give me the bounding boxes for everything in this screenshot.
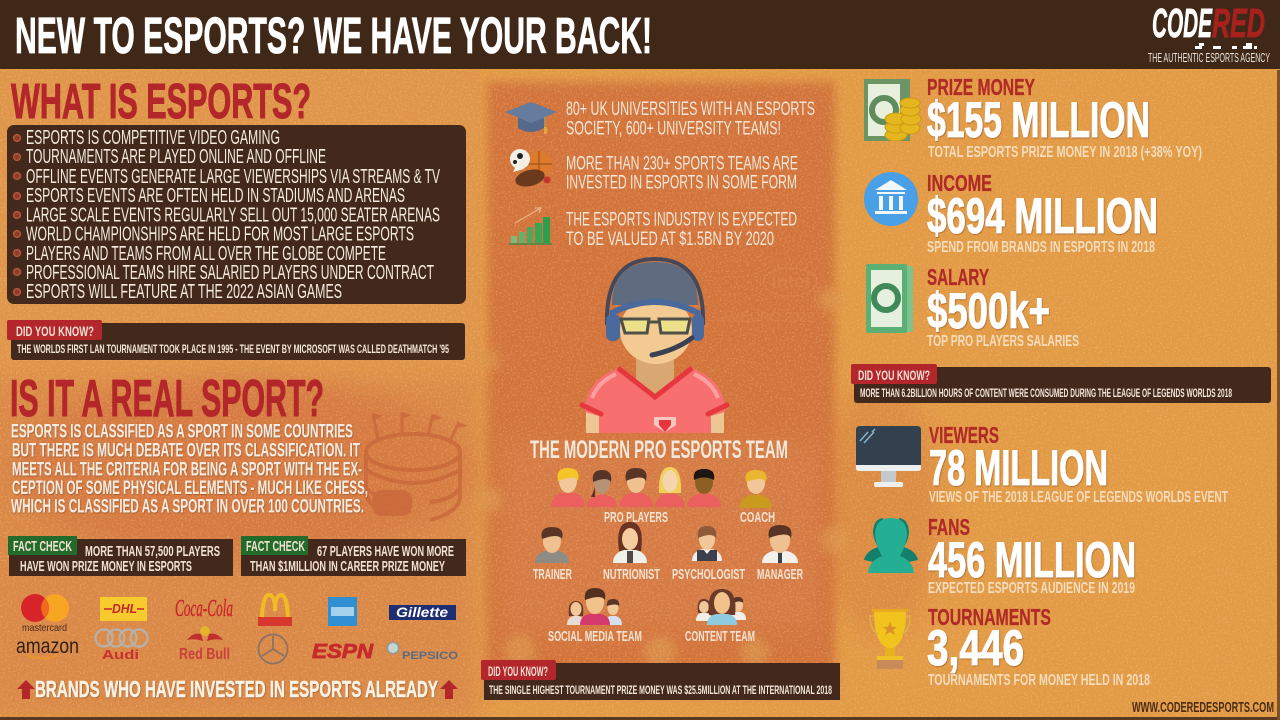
stat: salary: $500k+ (927, 283, 1050, 339)
callout: did you know 1995: THE WORLDS FIRST LAN TOURNAMENT TOOK PLACE IN 1995 - THE EVENT BY MICROSOFT WAS CALLED DEATHMATCH '95 (17, 342, 449, 356)
heading: team: THE MODERN PRO ESPORTS TEAM (530, 436, 788, 464)
person: trainer: TRAINER (533, 567, 572, 583)
group: social media team: SOCIAL MEDIA TEAM (548, 629, 642, 645)
callout: fact check players: FACT CHECK (13, 539, 72, 555)
stat: fans: FANS (928, 514, 970, 540)
stat: salary: SALARY (927, 264, 989, 290)
logo: dhl: DHL (112, 601, 137, 616)
stat: income: $694 MILLION (927, 188, 1158, 244)
stat: income: SPEND FROM BRANDS IN ESPORTS IN 2018 (927, 239, 1155, 256)
callout: did you know 1995: DID YOU KNOW? (16, 323, 94, 339)
logo: mcdonalds (258, 595, 292, 626)
stat: tournaments: TOURNAMENTS FOR MONEY HELD IN 2018 (928, 672, 1150, 689)
caption: brands with arrows: BRANDS WHO HAVE INVESTED IN ESPORTS ALREADY (35, 676, 438, 702)
icon: trophy (870, 609, 910, 669)
header band (0, 0, 1280, 69)
icon: sports balls (510, 149, 552, 189)
stat: prize money: PRIZE MONEY (927, 74, 1035, 100)
callout: did you know prize: THE SINGLE HIGHEST TOURNAMENT PRIZE MONEY WAS $25.5MILLION AT THE INTERNATIONAL 2018 (489, 683, 832, 697)
stat: sports teams: INVESTED IN ESPORTS IN SOME FORM (566, 172, 797, 194)
logo: red bull (179, 626, 230, 663)
list panel: LARGE SCALE EVENTS REGULARLY SELL OUT 15,000 SEATER ARENAS (26, 204, 440, 226)
logo: red bull: Red Bull (179, 646, 230, 663)
callout: did you know 1995 (7, 320, 465, 360)
person: coach: COACH (740, 510, 775, 526)
group: social media team (548, 588, 642, 645)
logo: espn: ESPN (312, 641, 374, 663)
icon: stadium backdrop (366, 412, 468, 520)
panel: is it a real sport (10, 370, 368, 518)
illustration: pro gamer (582, 259, 727, 433)
stat: industry value: TO BE VALUED AT $1.5BN BY 2020 (566, 228, 774, 250)
stat: fans: EXPECTED ESPORTS AUDIENCE IN 2019 (928, 580, 1135, 597)
group: content team: CONTENT TEAM (685, 629, 755, 645)
callout: fact check players: MORE THAN 57,500 PLAYERS (85, 544, 220, 560)
logo: coca-cola: Coca-Cola (175, 596, 233, 622)
icon: money and coins (864, 79, 921, 141)
icon: graduation cap (505, 102, 557, 134)
list panel: ESPORTS WILL FEATURE AT THE 2022 ASIAN GAMES (26, 281, 342, 303)
callout: fact check players: HAVE WON PRIZE MONEY IN ESPORTS (20, 559, 192, 575)
logo: american express (328, 597, 357, 626)
callout: fact check millionaires: FACT CHECK (246, 539, 305, 555)
stat: viewers: VIEWERS (929, 422, 999, 448)
icon: banknote (866, 264, 913, 333)
stat: prize money (864, 74, 1202, 161)
stat: tournaments: 3,446 (927, 620, 1024, 676)
list panel: PROFESSIONAL TEAMS HIRE SALARIED PLAYERS UNDER CONTRACT (26, 262, 434, 284)
list panel (7, 125, 466, 304)
callout: fact check millionaires: 67 PLAYERS HAVE WON MORE (317, 544, 454, 560)
paragraph: classification: BUT THERE IS MUCH DEBATE OVER ITS CLASSIFICATION. IT (12, 440, 360, 462)
stat: sports teams: MORE THAN 230+ SPORTS TEAMS ARE (566, 152, 798, 174)
ghost sponsor backdrop: AMBURG 2018 (720, 309, 815, 326)
stat: tournaments (870, 604, 1150, 689)
stat: viewers (856, 422, 1228, 506)
stat: industry value (566, 208, 797, 250)
logo: audi: Audi (102, 647, 139, 662)
panel: centre stats (505, 98, 815, 250)
stat: salary (866, 264, 1079, 350)
paragraph: classification: ESPORTS IS CLASSIFIED AS A SPORT IN SOME COUNTRIES (11, 422, 353, 442)
stat: industry value: THE ESPORTS INDUSTRY IS EXPECTED (566, 208, 797, 230)
logo: audi (96, 630, 148, 662)
callout: did you know hours (851, 364, 1271, 403)
stat: universities: 80+ UK UNIVERSITIES WITH AN ESPORTS (566, 98, 815, 120)
person: manager (757, 525, 803, 583)
logo: amazon: amazon (16, 635, 79, 658)
icon: bank (864, 172, 918, 226)
logo: mastercard: mastercard (22, 622, 67, 634)
title: NEW TO ESPORTS? WE HAVE YOUR BACK! (15, 7, 652, 64)
stat: fans (864, 514, 1136, 597)
list panel: ESPORTS IS COMPETITIVE VIDEO GAMING (26, 127, 280, 149)
logo: pepsico (388, 642, 459, 662)
logo: CodeRed (1148, 0, 1270, 65)
stat: prize money: $155 MILLION (927, 92, 1150, 148)
stat: income: INCOME (927, 170, 992, 196)
person: psychologist: PSYCHOLOGIST (672, 567, 745, 583)
logo: dhl (100, 597, 147, 621)
list panel: TOURNAMENTS ARE PLAYED ONLINE AND OFFLINE (26, 146, 326, 168)
heading: is it a real sport: IS IT A REAL SPORT? (10, 370, 324, 428)
callout: fact check millionaires: THAN $1MILLION IN CAREER PRIZE MONEY (250, 559, 445, 575)
person: manager: MANAGER (757, 567, 803, 583)
person: psychologist (672, 526, 745, 583)
stat: fans: 456 MILLION (928, 532, 1136, 588)
logo: mercedes (258, 634, 288, 664)
stat: tournaments: TOURNAMENTS (928, 604, 1051, 630)
brand logos (16, 594, 459, 664)
heading: what is esports: WHAT IS ESPORTS? (11, 75, 311, 129)
logo: pepsico: PEPSICO (402, 650, 459, 662)
callout: did you know prize (481, 660, 840, 700)
paragraph: classification: MEETS ALL THE CRITERIA FOR BEING A SPORT WITH THE EX- (12, 460, 362, 480)
list panel: WORLD CHAMPIONSHIPS ARE HELD FOR MOST LARGE ESPORTS (26, 224, 414, 246)
logo: gillette: Gillette (396, 604, 448, 620)
ghost sponsor backdrop: intel (772, 272, 810, 292)
stat: salary: TOP PRO PLAYERS SALARIES (927, 333, 1079, 350)
stat: sports teams (566, 152, 798, 194)
ghost sponsor backdrop (720, 268, 817, 326)
paragraph: classification: CEPTION OF SOME PHYSICAL ELEMENTS - MUCH LIKE CHESS, (12, 478, 368, 499)
logo: CodeRed: CODE (1152, 0, 1213, 46)
panel: what is esports (7, 75, 466, 304)
person: nutritionist: NUTRIONIST (603, 567, 660, 583)
icon: people (864, 518, 918, 573)
callout: did you know prize: DID YOU KNOW? (488, 663, 548, 679)
stat: universities (566, 98, 815, 140)
paragraph: classification (11, 422, 368, 518)
callout: did you know hours: DID YOU KNOW? (858, 367, 930, 383)
caption: brands with arrows (17, 676, 458, 702)
stat: income (864, 170, 1158, 256)
callout: fact check players (8, 536, 233, 576)
panel: modern pro esports team (530, 436, 803, 645)
group: pro players (551, 467, 721, 526)
stat: viewers: 78 MILLION (929, 440, 1108, 496)
list panel: ESPORTS EVENTS ARE OFTEN HELD IN STADIUMS AND ARENAS (26, 185, 405, 207)
stat: universities: SOCIETY, 600+ UNIVERSITY TEAMS! (566, 118, 781, 140)
group: content team (685, 589, 755, 645)
list panel: PLAYERS AND TEAMS FROM ALL OVER THE GLOBE COMPETE (26, 243, 386, 265)
person: nutritionist (603, 522, 660, 583)
group: pro players: PRO PLAYERS (604, 510, 668, 526)
paragraph: classification: WHICH IS CLASSIFIED AS A SPORT IN OVER 100 COUNTRIES. (11, 496, 364, 518)
icon: growth chart (509, 208, 552, 244)
logo: mastercard (21, 594, 69, 634)
person: trainer (533, 527, 572, 583)
icon: monitor (856, 426, 921, 487)
list panel: OFFLINE EVENTS GENERATE LARGE VIEWERSHIPS VIA STREAMS & TV (26, 166, 440, 188)
callout: fact check millionaires (241, 536, 466, 576)
person: coach (740, 470, 775, 526)
